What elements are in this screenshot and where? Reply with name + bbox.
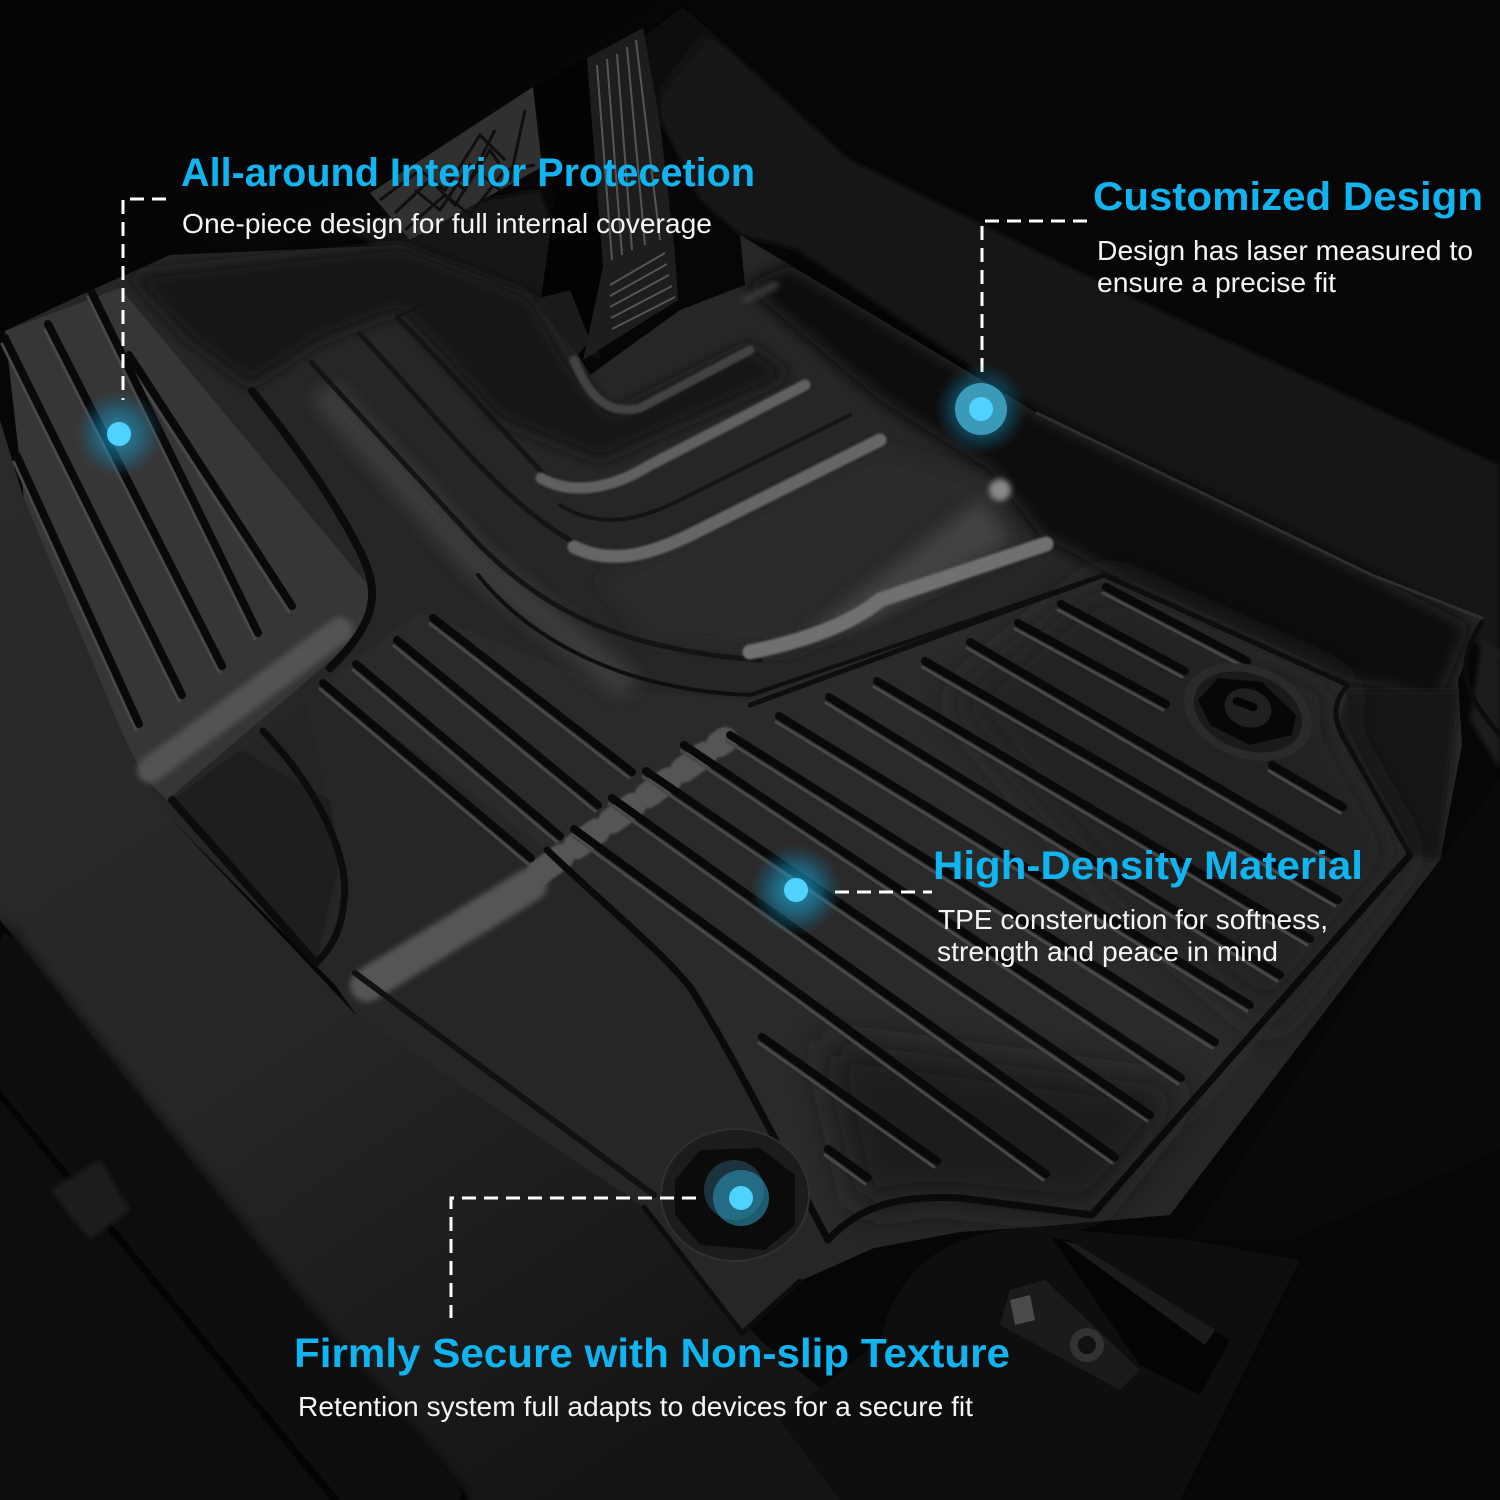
lower pad <box>345 880 795 1333</box>
mat heel ridge highlights <box>150 285 1500 1333</box>
callout: High-Density Material: strength and peace in mind <box>937 936 1278 967</box>
callout: All-around Interior Protection <box>75 151 755 478</box>
heading: All-around Interior Protecetion <box>181 151 755 195</box>
description: One-piece design for full internal coverage <box>182 208 712 239</box>
hotspot marker <box>713 1170 769 1226</box>
retention clip: upper right <box>1170 646 1326 778</box>
connector line <box>835 890 932 894</box>
callout: Firmly Secure <box>294 1170 1010 1422</box>
top shadow on mat <box>130 245 790 460</box>
connector line <box>982 221 1087 372</box>
connector line <box>123 199 166 400</box>
callout: Customized Design <box>935 175 1483 455</box>
mat wall shadow <box>745 265 1470 700</box>
description: TPE consteruction for softness, <box>938 904 1328 935</box>
floor mat body <box>5 235 1482 1333</box>
footrest surface <box>5 288 373 800</box>
accelerator pedal <box>532 28 678 360</box>
heading: High-Density Material <box>933 844 1363 888</box>
upper panel lit <box>600 450 1030 650</box>
groove highlights <box>2 297 1340 1184</box>
pedal: brake <box>370 58 603 360</box>
retention clip: lower <box>661 1129 809 1261</box>
left pad <box>172 705 344 963</box>
seat rail carpet and bracket <box>780 1227 1300 1500</box>
callout: High-Density Material <box>750 844 1363 967</box>
heading: Firmly Secure with Non-slip Texture <box>294 1330 1010 1376</box>
connector line <box>451 1198 696 1318</box>
hotspot marker <box>750 844 842 936</box>
hotspot marker <box>935 363 1027 455</box>
heading: Customized Design <box>1093 175 1483 219</box>
right outer lip <box>1338 690 1458 860</box>
right groove panel <box>323 575 1410 1236</box>
vignette <box>0 0 660 331</box>
soft lit patch <box>800 500 1010 640</box>
callout: Customized Design: ensure a precise fit <box>1097 267 1336 298</box>
description: Retention system full adapts to devices for a secure fit <box>298 1391 973 1422</box>
hotspot marker <box>75 390 163 478</box>
description: Design has laser measured to <box>1097 235 1473 266</box>
groove channels <box>5 291 1343 1178</box>
